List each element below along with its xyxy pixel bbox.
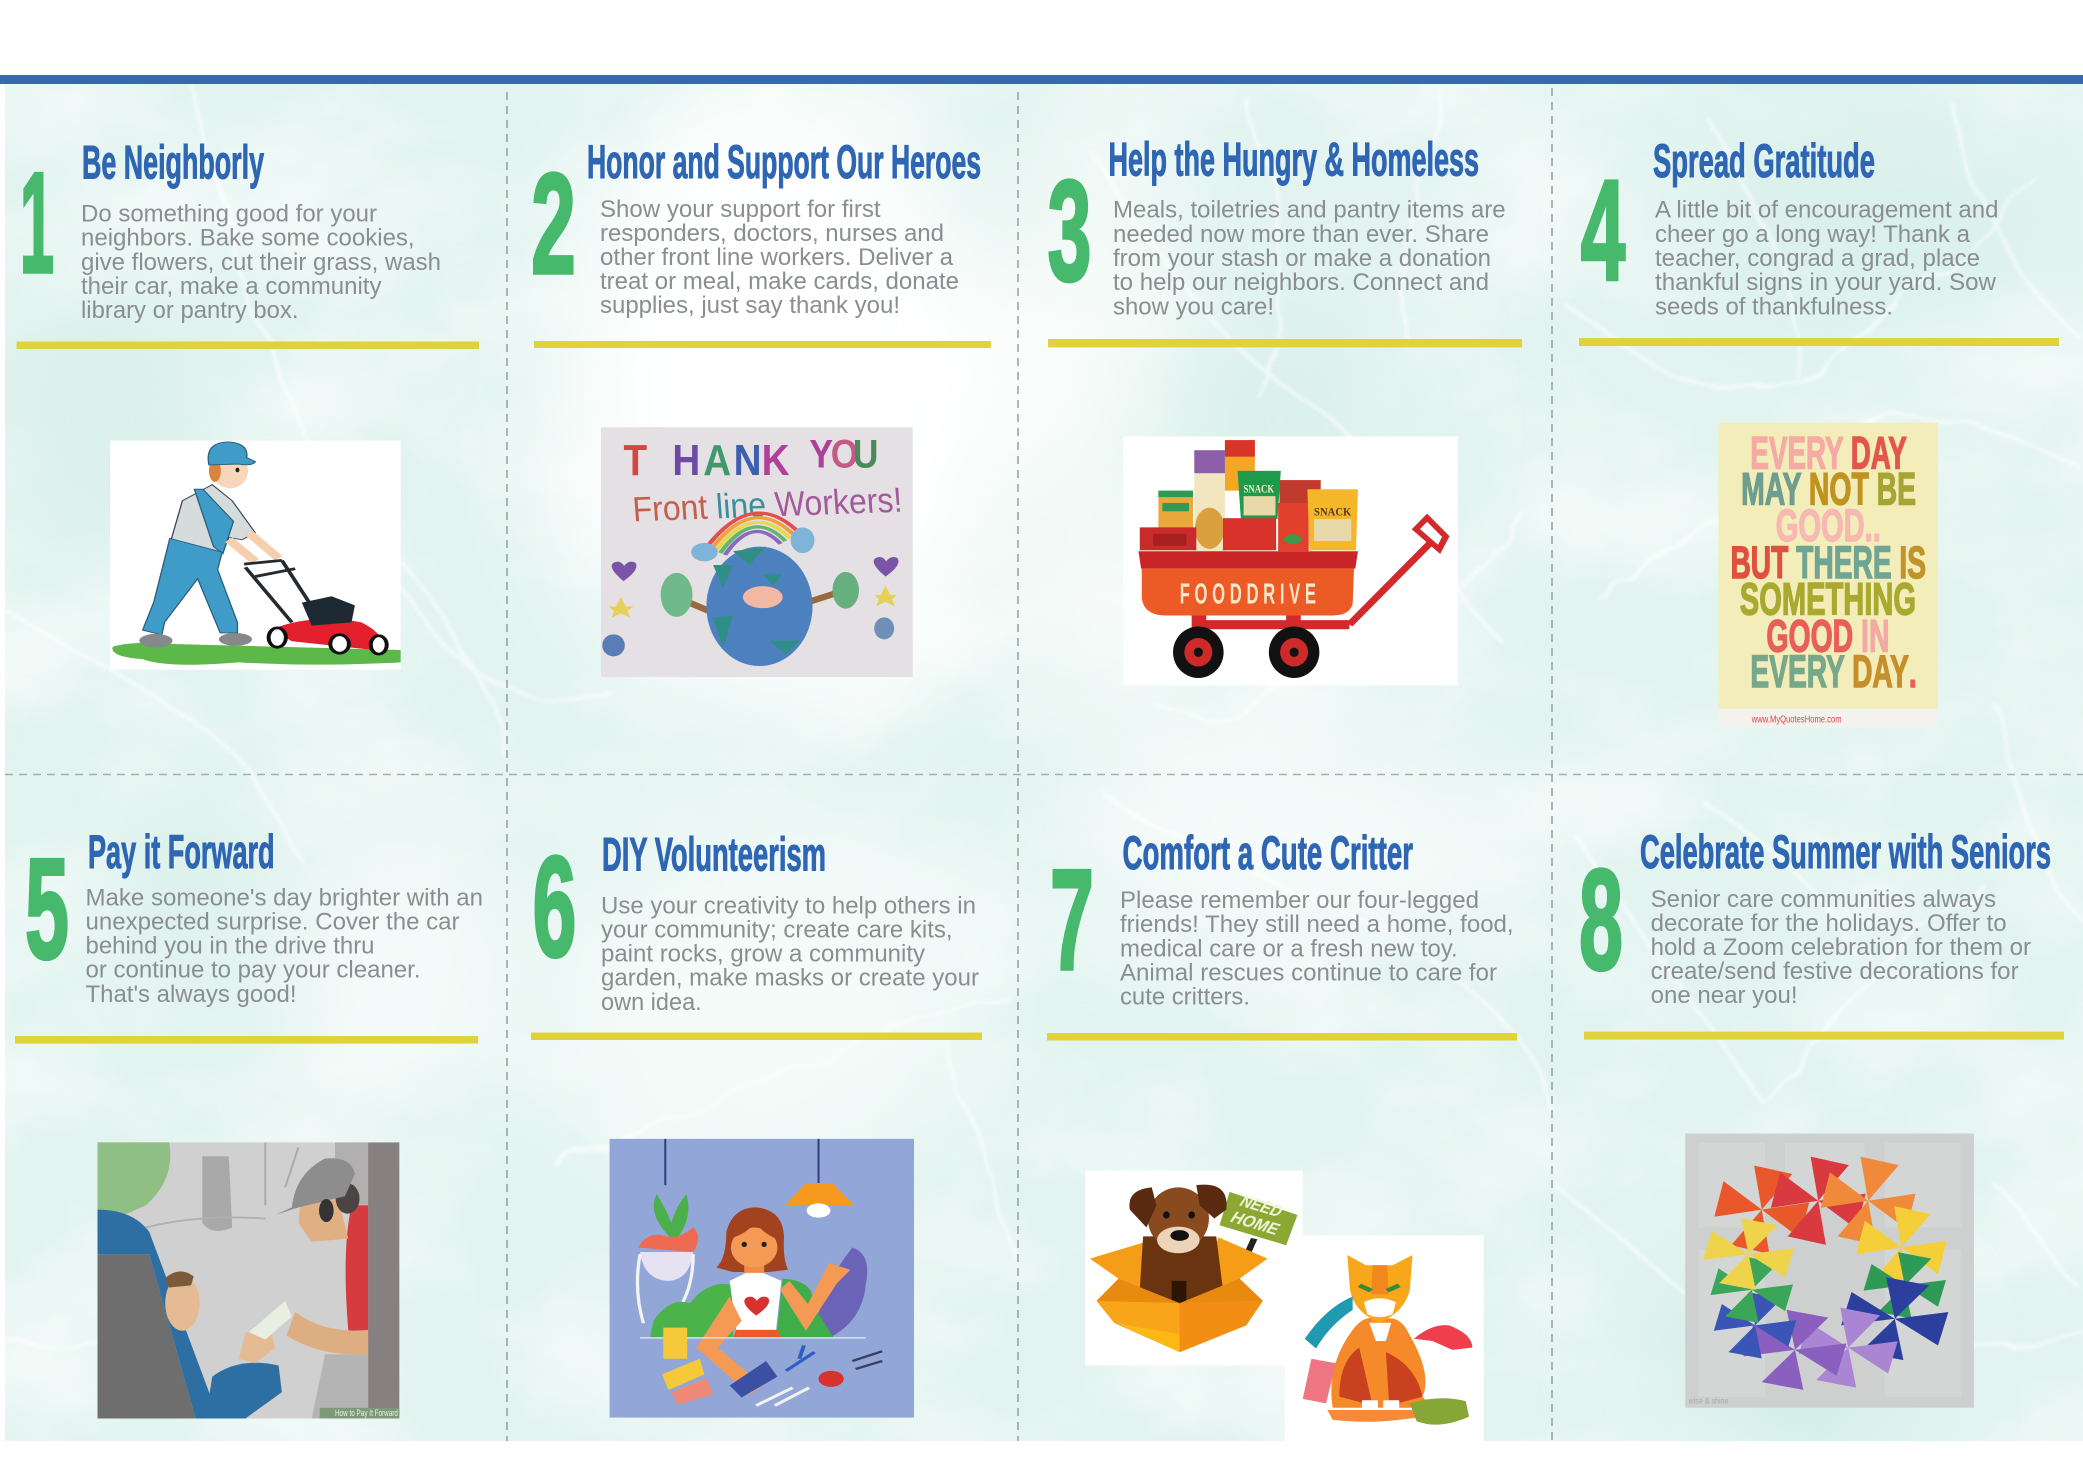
heading: Honor and Support Our Heroes bbox=[587, 135, 981, 188]
image: dog in box and cat: HOME bbox=[1227, 1209, 1283, 1239]
body text: Do something good for your bbox=[81, 201, 377, 228]
number 3: 3 bbox=[1048, 152, 1091, 311]
number 7: 7 bbox=[1050, 841, 1094, 1000]
image: every day quote poster: EVERY DAY. bbox=[1750, 646, 1917, 697]
heading: DIY Volunteerism bbox=[602, 827, 826, 880]
image: thank you front line workers drawing: O bbox=[831, 432, 858, 476]
panel: Be Neighborly bbox=[17, 136, 479, 670]
image: every day quote poster: GOOD IN bbox=[1766, 610, 1889, 661]
body text: or continue to pay your cleaner. bbox=[86, 957, 420, 984]
image: every day quote poster: www.MyQuotesHome.com bbox=[1751, 714, 1842, 725]
image: pinwheel wreath on door bbox=[1685, 1134, 1974, 1408]
body text: behind you in the drive thru bbox=[86, 933, 374, 960]
body text bbox=[81, 201, 441, 324]
body text: to help our neighbors. Connect and bbox=[1113, 269, 1489, 296]
panel: Celebrate Summer with Seniors bbox=[1579, 825, 2064, 1408]
image: thank you front line workers drawing: Y bbox=[809, 432, 833, 476]
body text: your community; create care kits, bbox=[601, 917, 952, 944]
panel: Honor and Support Our Heroes bbox=[531, 135, 991, 677]
body text: seeds of thankfulness. bbox=[1655, 293, 1893, 320]
image: thank you front line workers drawing: U bbox=[853, 432, 878, 476]
divider bbox=[1584, 1032, 2064, 1040]
body text: neighbors. Bake some cookies, bbox=[81, 225, 415, 252]
body text: own idea. bbox=[601, 989, 702, 1016]
body text: medical care or a fresh new toy. bbox=[1120, 935, 1458, 962]
image: paying at drive thru bbox=[98, 1142, 399, 1419]
divider bbox=[1047, 1033, 1517, 1040]
heading: Help the Hungry & Homeless bbox=[1108, 133, 1479, 186]
image: man mowing lawn bbox=[110, 441, 401, 670]
body text: That's always good! bbox=[86, 981, 296, 1008]
number 6: 6 bbox=[533, 828, 576, 987]
body text: their car, make a community bbox=[81, 273, 382, 300]
body text: Please remember our four-legged bbox=[1120, 887, 1479, 914]
body text: cute critters. bbox=[1120, 983, 1250, 1010]
body text: thankful signs in your yard. Sow bbox=[1655, 269, 1997, 296]
heading: Pay it Forward bbox=[88, 825, 275, 878]
panel: Comfort a Cute Critter bbox=[1047, 826, 1517, 1441]
body text: paint rocks, grow a community bbox=[601, 941, 925, 968]
image: thank you front line workers drawing: K bbox=[762, 436, 790, 485]
divider bbox=[1579, 338, 2059, 346]
number 4: 4 bbox=[1581, 150, 1625, 310]
body text: needed now more than ever. Share bbox=[1113, 221, 1489, 248]
number 1: 1 bbox=[20, 143, 54, 303]
panel: Spread Gratitude bbox=[1579, 134, 2059, 728]
image: thank you front line workers drawing: Front line Workers! bbox=[631, 481, 904, 529]
heading: Be Neighborly bbox=[82, 136, 264, 188]
image: pinwheel wreath on door: wise & shine bbox=[1688, 1397, 1729, 1406]
number 8: 8 bbox=[1579, 841, 1623, 1000]
image: food drive wagon: F O O D D R I V E bbox=[1180, 578, 1316, 610]
image: every day quote poster: EVERY DAY bbox=[1750, 428, 1907, 478]
image: thank you front line workers drawing: N bbox=[734, 436, 762, 485]
body text: from your stash or make a donation bbox=[1113, 245, 1491, 272]
number 5: 5 bbox=[25, 830, 69, 989]
heading: Spread Gratitude bbox=[1653, 134, 1875, 187]
body text: decorate for the holidays. Offer to bbox=[1651, 910, 2007, 937]
body text bbox=[600, 196, 959, 319]
body text bbox=[1113, 196, 1506, 320]
body text: teacher, congrad a grad, place bbox=[1655, 245, 1980, 272]
image: thank you front line workers drawing bbox=[601, 427, 913, 677]
image: food drive wagon bbox=[1123, 436, 1458, 685]
divider bbox=[1048, 339, 1522, 347]
number 2: 2 bbox=[531, 143, 576, 304]
body text: unexpected surprise. Cover the car bbox=[86, 909, 460, 936]
image: every day quote poster: GOOD.. bbox=[1776, 500, 1881, 551]
image: thank you front line workers drawing: T bbox=[623, 436, 647, 485]
image: woman crafting at table bbox=[610, 1139, 914, 1418]
body text bbox=[86, 885, 483, 1008]
panel: Pay it Forward bbox=[15, 825, 483, 1419]
divider bbox=[15, 1036, 478, 1044]
body text: garden, make masks or create your bbox=[601, 965, 979, 992]
body text: one near you! bbox=[1651, 982, 1798, 1009]
body text: treat or meal, make cards, donate bbox=[600, 268, 959, 295]
image: every day quote poster: BUT THERE IS bbox=[1730, 537, 1926, 588]
body text: Senior care communities always bbox=[1651, 886, 1996, 913]
body text: give flowers, cut their grass, wash bbox=[81, 249, 441, 276]
body text: A little bit of encouragement and bbox=[1655, 196, 1998, 224]
body text bbox=[1655, 196, 1998, 320]
body text bbox=[601, 893, 979, 1016]
image: dog in box and cat: NEED bbox=[1236, 1193, 1286, 1221]
body text: show you care! bbox=[1113, 293, 1274, 320]
divider bbox=[534, 341, 991, 348]
image: every day quote poster bbox=[1719, 423, 1938, 728]
image: food drive wagon: SNACK bbox=[1314, 506, 1352, 519]
body text: Meals, toiletries and pantry items are bbox=[1113, 196, 1506, 224]
heading: Comfort a Cute Critter bbox=[1122, 826, 1413, 879]
body text: Show your support for first bbox=[600, 196, 881, 223]
panel: Pay it Forward: How to Pay It Forward bbox=[335, 1409, 398, 1419]
top blue bar bbox=[0, 75, 2083, 84]
image: dog in box and cat bbox=[1085, 1170, 1484, 1441]
divider bbox=[531, 1032, 982, 1040]
body text bbox=[1651, 886, 2031, 1009]
divider bbox=[17, 342, 479, 349]
body text: responders, doctors, nurses and bbox=[600, 220, 944, 247]
body text: other front line workers. Deliver a bbox=[600, 244, 954, 271]
body text: library or pantry box. bbox=[81, 297, 298, 324]
body text: supplies, just say thank you! bbox=[600, 292, 900, 319]
image: food drive wagon: SNACK bbox=[1244, 483, 1274, 495]
body text: Animal rescues continue to care for bbox=[1120, 959, 1497, 986]
image: thank you front line workers drawing: A bbox=[703, 436, 731, 485]
body text: cheer go a long way! Thank a bbox=[1655, 221, 1971, 248]
body text: Make someone's day brighter with an bbox=[86, 885, 483, 912]
body text: create/send festive decorations for bbox=[1651, 958, 2019, 985]
panel: Help the Hungry & Homeless bbox=[1048, 133, 1522, 685]
image: thank you front line workers drawing: H bbox=[672, 436, 700, 485]
body text: hold a Zoom celebration for them or bbox=[1651, 934, 2031, 961]
body text: Use your creativity to help others in bbox=[601, 893, 976, 920]
image: every day quote poster: MAY NOT BE bbox=[1741, 463, 1916, 514]
body text bbox=[1120, 887, 1514, 1010]
panel: DIY Volunteerism bbox=[531, 827, 982, 1418]
body text: friends! They still need a home, food, bbox=[1120, 911, 1514, 938]
